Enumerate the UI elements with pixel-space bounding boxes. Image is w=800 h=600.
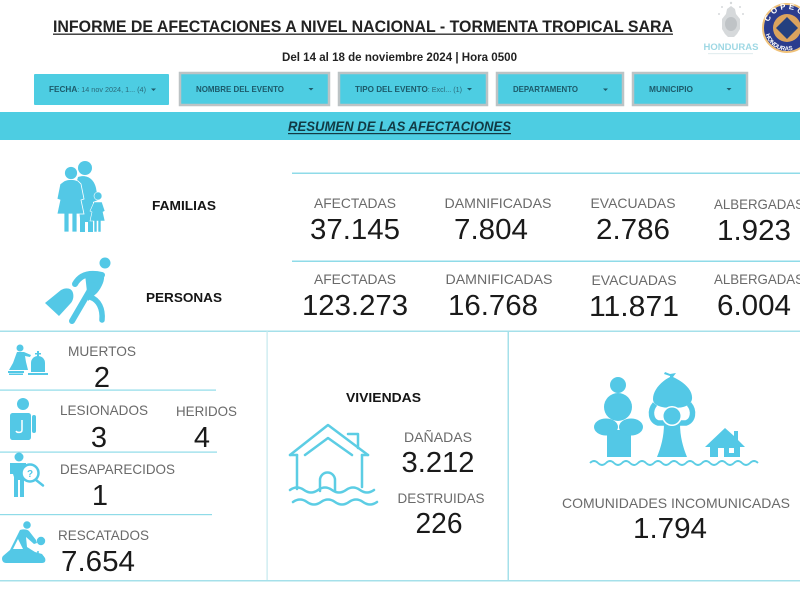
familias stat: evacuadas: 2.786 [596,214,670,246]
section banner: resumen de las afectaciones [0,112,800,140]
personas stat: evacuadas [589,272,679,323]
personas stat: damnificadas: 16.768 [448,290,538,322]
personas stat: evacuadas: 11.871 [589,291,679,323]
stat: comunidades incomunicadas: 1.794 [633,513,707,545]
stat: lesionados: 3 [91,422,107,454]
icon: isolated community [594,372,745,457]
familias stat: damnificadas [444,195,552,246]
heading: personas: PERSONAS [146,290,222,305]
stat: desaparecidos: DESAPARECIDOS [60,461,175,477]
stat: dañadas: DAÑADAS [404,429,472,445]
icon: family [57,161,105,232]
familias stat: damnificadas: DAMNIFICADAS [444,195,552,211]
personas stat: evacuadas: EVACUADAS [592,272,676,288]
stat: dañadas: 3.212 [402,447,474,479]
icon: rescuer [2,521,45,563]
filter: departamento: DEPARTAMENTO [513,84,578,94]
personas stat: damnificadas [446,271,552,322]
personas stat: afectadas: AFECTADAS [314,271,396,287]
stat: destruidas: DESTRUIDAS [398,490,484,506]
personas stat: albergadas [714,271,800,322]
icon: person with suitcase [45,258,110,321]
stat: lesionados: LESIONADOS [60,402,148,418]
stat: rescatados: 7.654 [61,546,135,578]
stat: heridos: 4 [194,422,210,454]
stat: rescatados [58,527,149,578]
filter: nombre del evento: NOMBRE DEL EVENTO [196,84,284,94]
icon: missing person with magnifier: ? [27,469,33,480]
stat: muertos [68,343,136,394]
subtitle: date and time: Del 14 al 18 de noviembre 2024 | Hora 0500 [282,50,517,64]
familias stat: afectadas [310,195,400,246]
logo: Honduras [704,2,758,54]
filter: municipio [633,73,747,105]
stat: heridos [176,403,237,454]
filter: tipo del evento [339,73,487,105]
section banner: resumen de las afectaciones: RESUMEN DE LAS AFECTACIONES [288,118,512,134]
stat: heridos: HERIDOS [176,403,237,419]
personas stat: afectadas [302,271,408,322]
personas stat: damnificadas: DAMNIFICADAS [446,271,552,287]
familias stat: evacuadas [590,195,676,246]
stat: muertos: 2 [94,362,110,394]
stat: dañadas [402,429,474,479]
filter: departamento [497,73,623,105]
familias stat: afectadas: AFECTADAS [314,195,396,211]
stat: rescatados: RESCATADOS [58,527,149,543]
stat: comunidades incomunicadas [562,495,790,545]
heading: viviendas: VIVIENDAS [346,390,421,405]
filter: fecha [34,74,169,105]
filter: nombre del evento [180,73,329,105]
stat: desaparecidos: 1 [92,480,108,512]
familias stat: damnificadas: 7.804 [454,214,528,246]
icon: missing person with magnifier [10,452,43,497]
icon: mourner at grave [8,344,48,375]
logo: Honduras: HONDURAS [704,42,758,53]
filter: fecha: FECHA: 14 nov 2024, 1... (4) [49,84,146,94]
familias stat: albergadas: 1.923 [717,215,791,247]
heading: familias: FAMILIAS [152,198,216,213]
stat: desaparecidos [60,461,175,512]
stat: destruidas: 226 [416,508,462,540]
wave line under community icon [590,461,758,465]
familias stat: afectadas: 37.145 [310,214,400,246]
stat: lesionados [60,402,148,454]
personas stat: afectadas: 123.273 [302,290,408,322]
logo: COPECO: HONDURAS [766,33,792,50]
logo: COPECO [762,3,800,53]
icon: injured person [10,398,36,440]
title: INFORME DE AFECTACIONES A NIVEL NACIONAL - TORMENTA TROPICAL SARA [53,17,673,36]
familias stat: albergadas [714,196,800,247]
familias stat: evacuadas: EVACUADAS [590,195,676,211]
icon: flooded house [290,425,377,504]
stat: muertos: MUERTOS [68,343,136,359]
filter: tipo del evento: TIPO DEL EVENTO: Excl... (1) [355,84,462,94]
stat: destruidas [398,490,484,540]
stat: comunidades incomunicadas: COMUNIDADES INCOMUNICADAS [562,495,790,511]
personas stat: albergadas: 6.004 [717,290,791,322]
filter: municipio: MUNICIPIO [649,84,693,94]
